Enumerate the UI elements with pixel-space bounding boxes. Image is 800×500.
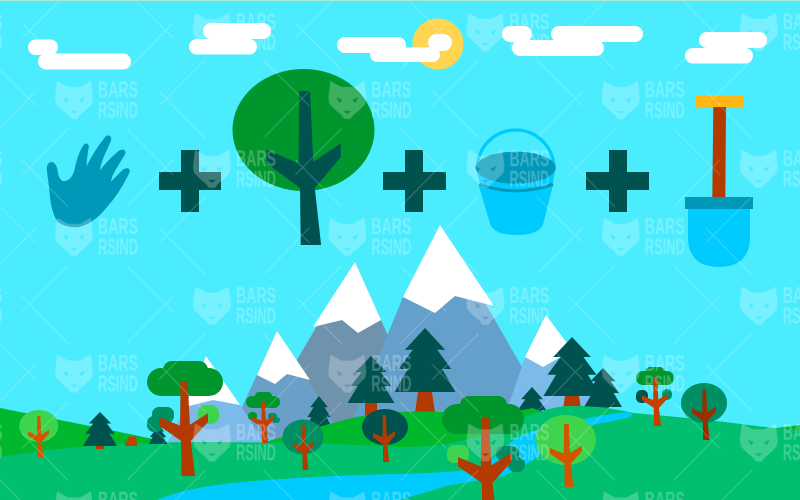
river (157, 412, 632, 500)
round tree, light green, centre (536, 415, 596, 487)
icon: bucket (476, 130, 556, 235)
hills (0, 406, 800, 500)
round tree, far right (681, 383, 727, 440)
top edge line (0, 0, 800, 1)
icon: big tree (232, 69, 374, 245)
cloud-crown tree, large left (147, 361, 223, 476)
clouds (28, 23, 767, 70)
round tree, teal (282, 420, 324, 470)
cloud-crown tree, right (636, 367, 674, 426)
round tree, light green, far left (19, 410, 58, 457)
pine trees behind hills (306, 328, 622, 429)
sun (412, 18, 464, 70)
icon: hand (47, 136, 129, 227)
plus sign 2 (383, 150, 446, 212)
pine on left hill (83, 412, 117, 449)
round tree, dark (362, 409, 408, 462)
mountains (165, 225, 625, 450)
cloud-crown tree, large centre (442, 396, 525, 500)
plus sign 1 (159, 150, 221, 212)
plus sign 3 (586, 150, 649, 212)
cloud-crown tree, small (246, 392, 280, 443)
icon: shovel (685, 96, 753, 267)
stump (125, 436, 137, 446)
small pine by left tree (148, 425, 168, 444)
